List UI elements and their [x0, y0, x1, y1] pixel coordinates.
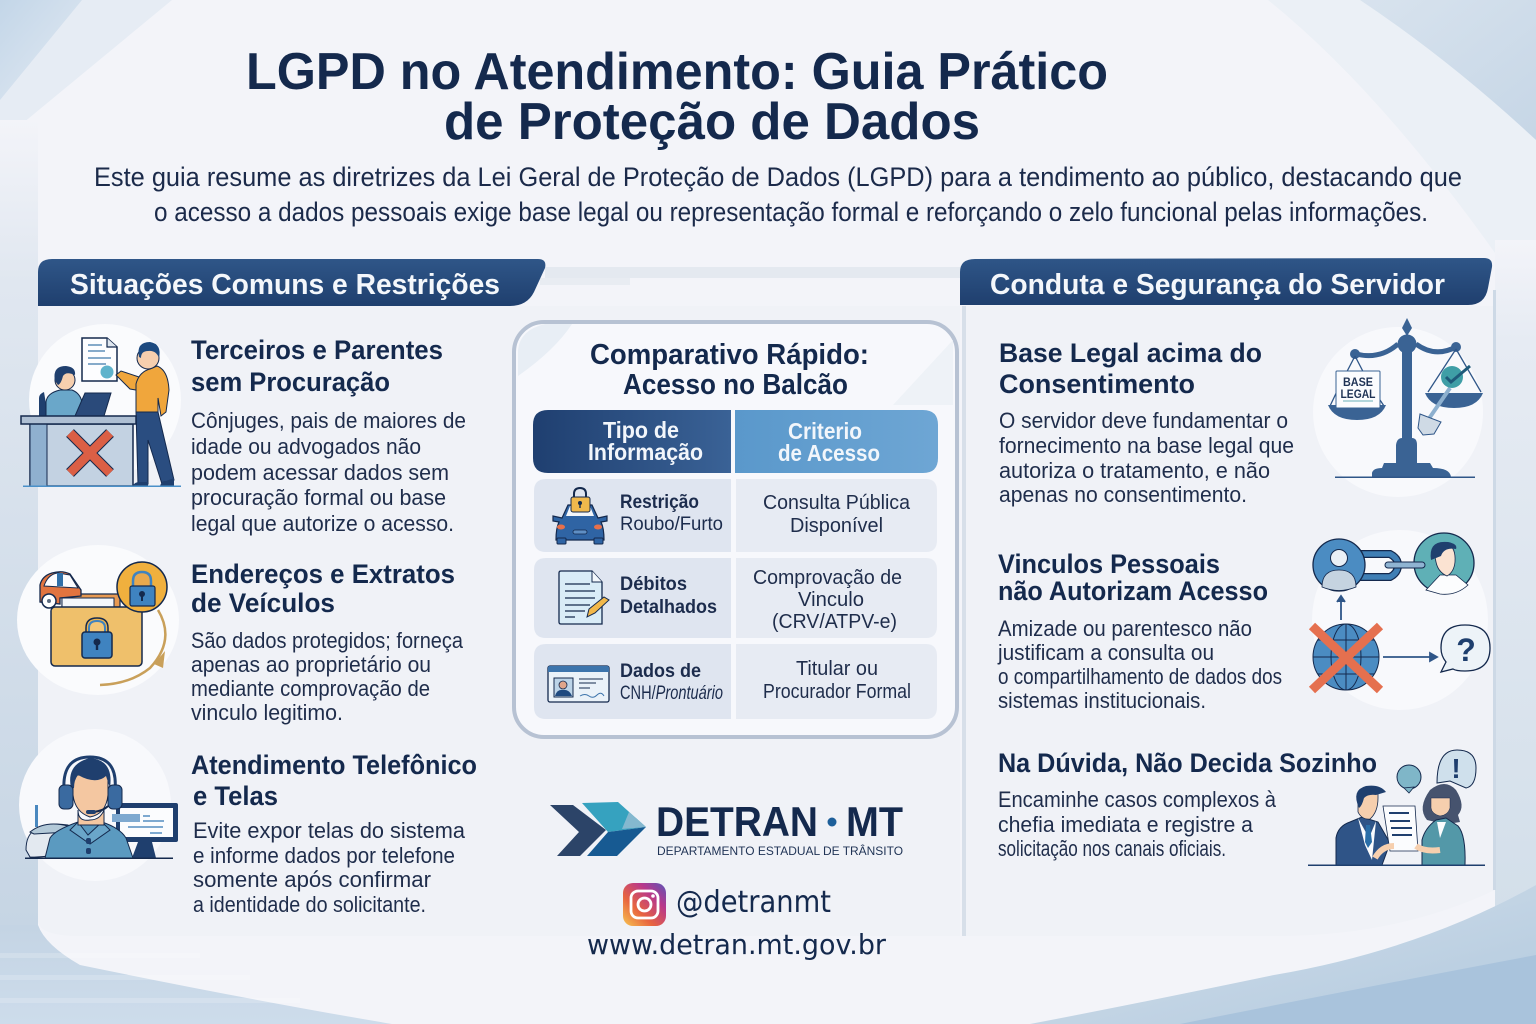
text block: endereços e extratos: São dados protegidos; forneça: [191, 628, 464, 653]
icon: carteira CNH: [548, 666, 609, 702]
heading: comparativo: Comparativo Rápido:: [590, 339, 869, 371]
heading band: conduta: Conduta e Segurança do Servidor: [990, 269, 1445, 301]
heading band: conduta: [960, 258, 1492, 305]
heading: comparativo: [590, 339, 869, 401]
text block: terceiros e parentes: legal que autorize o acesso.: [191, 511, 454, 536]
table row: restrição: Consulta Pública: [763, 492, 911, 514]
text block: atendimento telefônico: a identidade do solicitante.: [193, 892, 426, 917]
text block: endereços e extratos: vinculo legitimo.: [191, 700, 343, 725]
text block: endereços e extratos: mediante comprovação de: [191, 676, 430, 701]
text block: terceiros e parentes: podem acessar dados sem: [191, 460, 449, 485]
text block: endereços e extratos: [191, 559, 464, 725]
text block: terceiros e parentes: idade ou advogados não: [191, 434, 421, 459]
text block: na dúvida: solicitação nos canais oficiais.: [998, 836, 1226, 861]
icon: balança: BASE: [1343, 377, 1373, 389]
logo: DETRAN MT: [550, 798, 903, 858]
icon: balcão com procuração: [21, 324, 181, 487]
table row: dados de CNH: Dados de: [620, 661, 701, 682]
table row: restrição: Roubo/Furto: [620, 514, 723, 535]
icon: pasta com cadeado: [17, 545, 179, 695]
icon: documento com caneta: [559, 571, 609, 624]
text block: base legal: fornecimento na base legal que: [999, 433, 1294, 458]
text block: base legal: [999, 338, 1294, 507]
text block: terceiros e parentes: [191, 335, 466, 536]
text block: vínculos pessoais: não Autorizam Acesso: [998, 576, 1268, 606]
text block: atendimento telefônico: e Telas: [193, 781, 278, 811]
icon: balança: LEGAL: [1340, 389, 1376, 401]
text block: endereços e extratos: Endereços e Extratos: [191, 559, 455, 589]
table header: Informação: [588, 439, 703, 465]
table row: restrição: Restrição: [620, 492, 699, 513]
table row: dados de CNH: Titular ou: [796, 658, 878, 680]
panel: conduta e segurança: [960, 258, 1492, 866]
logo: DETRAN MT: DETRAN: [656, 798, 818, 845]
text block: base legal: apenas no consentimento.: [999, 482, 1247, 507]
text block: terceiros e parentes: Cônjuges, pais de maiores de: [191, 408, 466, 433]
table row: débitos: Vinculo: [798, 589, 864, 611]
table header: Tipo de: [603, 417, 679, 443]
title: de Proteção de Dados: [444, 93, 980, 151]
panel: comparativo rápido: [514, 322, 957, 737]
text block: endereços e extratos: de Veículos: [191, 588, 335, 618]
table row: dados de CNH: Procurador Formal: [763, 681, 911, 703]
intro text: o acesso a dados pessoais exige base legal ou representação formal e reforçando o zelo funcional pelas informações.: [154, 197, 1428, 227]
text block: vínculos pessoais: justificam a consulta ou: [997, 640, 1214, 665]
icon: vínculos e acesso negado: ?: [1456, 632, 1476, 668]
table row: débitos: Detalhados: [620, 597, 717, 618]
text block: terceiros e parentes: procuração formal ou base: [191, 485, 446, 510]
table row: restrição: [534, 479, 937, 552]
heading band: situações: [38, 259, 545, 306]
text block: vínculos pessoais: Amizade ou parentesco não: [998, 616, 1252, 641]
text block: base legal: autoriza o tratamento, e não: [999, 458, 1270, 483]
table header: [533, 410, 938, 473]
text block: na dúvida: Na Dúvida, Não Decida Sozinho: [998, 748, 1377, 778]
text block: atendimento telefônico: Evite expor telas do sistema: [193, 818, 466, 843]
icon: balança: [1313, 318, 1483, 497]
icon: vínculos e acesso negado: [1312, 530, 1490, 710]
text block: na dúvida: [998, 748, 1377, 861]
table row: restrição: Disponível: [790, 515, 883, 537]
table header: de Acesso: [778, 440, 880, 466]
text block: base legal: Consentimento: [999, 369, 1195, 399]
icon: colegas com documento: !: [1451, 753, 1461, 784]
panel: situações comuns e restrições: [17, 259, 545, 917]
text block: na dúvida: chefia imediata e registre a: [998, 812, 1254, 837]
website: www.detran.mt.gov.br: [587, 928, 886, 961]
table row: dados de CNH: [534, 644, 937, 719]
text block: vínculos pessoais: Vinculos Pessoais: [998, 549, 1220, 579]
social: instagram: @detranmt: [676, 885, 831, 920]
heading: comparativo: Acesso no Balcão: [623, 369, 848, 401]
social: instagram: [623, 883, 831, 926]
heading band: situações: Situações Comuns e Restrições: [70, 269, 500, 301]
text block: endereços e extratos: apenas ao proprietário ou: [191, 652, 431, 677]
table row: dados de CNH: CNH/Prontuário: [620, 683, 723, 704]
table row: débitos: [534, 558, 937, 638]
table row: débitos: (CRV/ATPV-e): [772, 611, 897, 633]
text block: atendimento telefônico: [191, 750, 477, 917]
icon: instagram: [623, 883, 666, 926]
icon: atendente com headset: [19, 729, 178, 881]
icon: chevrons: [550, 802, 646, 856]
table header: Criterio: [788, 418, 862, 444]
intro text: [94, 162, 1462, 227]
text block: base legal: Base Legal acima do: [999, 338, 1262, 368]
icon: carro com cadeado: [553, 488, 607, 544]
logo: DETRAN MT: MT: [846, 798, 903, 845]
logo: DETRAN MT: DEPARTAMENTO ESTADUAL DE TRÂNSITO: [657, 845, 903, 858]
table row: débitos: Débitos: [620, 574, 687, 595]
text block: vínculos pessoais: sistemas institucionais.: [998, 688, 1206, 713]
text block: na dúvida: Encaminhe casos complexos à: [998, 787, 1277, 812]
text block: atendimento telefônico: Atendimento Telefônico: [191, 750, 477, 780]
table row: débitos: Comprovação de: [753, 567, 902, 589]
text block: terceiros e parentes: sem Procuração: [191, 367, 390, 397]
title: [246, 43, 1108, 151]
icon: colegas com documento: [1308, 750, 1485, 866]
text block: vínculos pessoais: o compartilhamento de dados dos: [998, 664, 1282, 689]
text block: vínculos pessoais: [997, 549, 1282, 713]
text block: base legal: O servidor deve fundamentar o: [999, 408, 1288, 433]
text block: atendimento telefônico: e informe dados por telefone: [193, 843, 455, 868]
title: LGPD no Atendimento: Guia Prático: [246, 43, 1108, 101]
intro text: Este guia resume as diretrizes da Lei Geral de Proteção de Dados (LGPD) para a tendimento ao público, destacando que: [94, 162, 1462, 192]
text block: atendimento telefônico: somente após confirmar: [193, 867, 431, 892]
text block: terceiros e parentes: Terceiros e Parentes: [191, 335, 443, 365]
